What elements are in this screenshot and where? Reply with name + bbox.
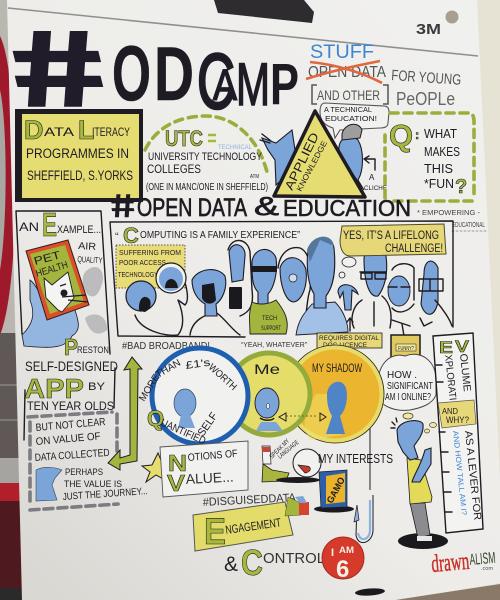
callout: a technical education [320, 103, 389, 138]
panel: what makes this fun: THIS [424, 162, 453, 176]
panel: data literacy programmes: ATA [44, 125, 74, 139]
subtitle: Stuff for young and other people: FOR YOUNG [391, 67, 462, 89]
panel: engagement: NGAGEMENT [224, 515, 282, 537]
callout: a technical education: A TECHNICAL [324, 105, 372, 114]
icon: fish hook [354, 428, 373, 543]
text: Preston: RESTON [77, 345, 109, 356]
title: #ODCamp [0, 9, 299, 128]
panel: university technology colleges: (ONE IN MANC/ONE IN SHEFFIELD) [146, 182, 268, 193]
quote heading: OMPUTING IS A FAMILY EXPERIENCE” [140, 229, 300, 241]
subtitle: Stuff for young and other people: AND OTHER [317, 87, 380, 103]
circle: quantified self: £1's [185, 357, 211, 372]
annotation: empowering educational: * EMPOWERING - [417, 208, 480, 217]
person: tall man in jacket [296, 237, 348, 335]
heading: #open data and education: # [107, 188, 139, 225]
panel: university technology colleges: UTC [165, 126, 203, 151]
text: disguised data: #DISGUISEDDATA [203, 492, 296, 509]
text: and control [224, 542, 325, 583]
panel: what makes this fun: : [415, 127, 419, 142]
badge: I am 6: 6 [336, 556, 349, 583]
callout: lifelong challenge: YES, IT'S A LIFELONG [343, 230, 439, 242]
person: screaming child [190, 270, 240, 335]
panel: volume exploration ruler: V [455, 337, 470, 356]
text: air quality: QUALITY [77, 254, 103, 265]
circle: me [228, 353, 326, 435]
panel: volume exploration ruler: XPLORATI [442, 354, 458, 401]
sign: funny? [391, 324, 420, 360]
icon: pet health tablet [26, 240, 89, 320]
text: perhaps the value is just the journey [62, 467, 148, 503]
panel: notions of value: ALUE... [185, 469, 234, 487]
text: perhaps the value is just the journey: JUST THE JOURNEY... [62, 486, 148, 503]
note: and why?: WHY? [446, 415, 469, 425]
panel: notions of value: OTIONS OF [187, 448, 238, 464]
panel: engagement [193, 502, 293, 552]
quote heading [115, 223, 300, 248]
note: and why?: AND [442, 406, 458, 416]
panel: university technology colleges: TECHNICAL [218, 144, 252, 151]
annotation: empowering educational: EDUCATIONAL [452, 222, 485, 229]
circle: quantified self: UANTIFIED [159, 417, 208, 447]
text: and control: & [224, 553, 238, 576]
panel: data literacy programmes: PROGRAMMES IN [26, 146, 129, 161]
heading: #open data and education: OPEN DATA [137, 194, 247, 222]
panel: an example, pet health app [16, 206, 110, 360]
flipchart clip [214, 0, 314, 23]
icon: speak my language ball: SPEAK MY [268, 437, 291, 460]
sign: funny?: FUNNY? [398, 346, 414, 352]
thought bubble: how significant am I online: SIGNIFICANT [387, 381, 433, 392]
panel: data literacy programmes: ITERACY [92, 125, 130, 139]
left column: self-designed app: TEN YEAR OLDS [27, 399, 114, 413]
callout: suffering from poor access technology: POOR ACCESS [119, 258, 166, 267]
person: tech support with sunglasses: TECH [262, 315, 277, 322]
panel: engagement: E [204, 511, 226, 552]
callout: a technical education: EDUCATION! [325, 114, 377, 123]
badge: I am 6 [322, 537, 364, 583]
panel: data literacy programmes: SHEFFIELD, S.YORKS [27, 167, 133, 183]
left column: self-designed app: BY [88, 381, 106, 393]
panel: volume exploration ruler: AS A LEVER FOR [462, 430, 483, 521]
icon: blue profile face [36, 467, 62, 501]
panel: computing is a family experience [110, 221, 453, 337]
callout: suffering from poor access technology: SUFFERING FROM [119, 248, 181, 257]
panel: volume exploration ruler: OLUME [457, 353, 473, 392]
panel: what makes this fun: Q [389, 118, 413, 153]
text: and control: ONTROL [263, 550, 325, 567]
circle: quantified self [137, 348, 248, 447]
annotation: a cliché [364, 156, 388, 192]
star [142, 453, 167, 482]
panel: what makes this fun: ? [455, 176, 467, 198]
person: man with square glasses [419, 261, 452, 326]
left column: self-designed app [24, 358, 148, 510]
quote heading: “ [115, 231, 119, 243]
arrow: double-headed me to shadow [279, 413, 326, 421]
icon: game book: GAMO [325, 476, 348, 505]
icon: speak my language ball [268, 437, 321, 477]
person: tech support with sunglasses [250, 249, 287, 334]
panel: what makes this fun [385, 113, 474, 201]
text: Preston: P [64, 334, 78, 360]
text: Preston [64, 334, 109, 360]
icon: blue fox [260, 130, 295, 185]
quote heading: C [123, 223, 139, 248]
callout: lifelong challenge [339, 224, 446, 278]
circle: quantified self: WORTH [206, 362, 239, 393]
panel: volume exploration ruler [433, 333, 483, 533]
panel: notions of value: V [167, 470, 186, 496]
circle: my shadow [286, 345, 384, 443]
circle: quantified self: SELF [196, 410, 221, 439]
panel: what makes this fun: *FUN [424, 177, 454, 191]
panel: data literacy programmes: L [78, 115, 94, 145]
title: #ODCamp: D [154, 32, 194, 117]
icon: game book [314, 470, 354, 512]
panel: notions of value: N [168, 450, 187, 476]
subtitle: Stuff for young and other people: PeOPLe [396, 89, 455, 109]
panel: an example, pet health app: E [42, 206, 57, 243]
badge: I am 6: AM [339, 545, 354, 555]
panel: notions of value [160, 441, 248, 497]
label: requires digital dog licence: DOG LICENCE [323, 343, 367, 349]
heading: #open data and education: EDUCATION [283, 195, 411, 221]
group: crying children [126, 263, 187, 335]
background: room left of the flipchart [0, 0, 30, 600]
panel: volume exploration ruler: AND HOW TALL AM I? [451, 430, 469, 516]
thought bubble: how significant am I online: AM I ONLINE? [385, 392, 431, 403]
heading: #open data and education: & [254, 191, 279, 221]
annotation: a cliché: CLICHÉ [364, 183, 388, 192]
circle: me: Me [254, 361, 280, 377]
title: #ODCamp: C [197, 37, 235, 125]
icon: dog with digital licence [338, 285, 358, 331]
triangle: applied knowledge [274, 111, 365, 197]
icon: blue hand [22, 280, 78, 347]
3M logo: 3M [416, 21, 441, 38]
circle: my shadow: MY SHADOW [312, 361, 362, 375]
callout: suffering from poor access technology: TECHNOLOGY [118, 272, 158, 279]
icon: speak my language ball: LANGUAGE [277, 439, 301, 461]
icon: person in flat cap [339, 124, 364, 190]
subtitle: Stuff for young and other people [306, 42, 462, 109]
punched hole [446, 10, 458, 24]
text: perhaps the value is just the journey: PERHAPS [65, 467, 103, 478]
panel: what makes this fun: WHAT [424, 127, 457, 141]
circle: quantified self: Q [147, 406, 164, 431]
text: air quality [77, 241, 104, 265]
subtitle: Stuff for young and other people: OPEN DATA [308, 64, 386, 81]
triangle: applied knowledge: APPLIED [282, 130, 322, 192]
background: floor strip at the bottom right [395, 584, 500, 600]
panel: data literacy programmes [15, 109, 143, 202]
decorative ink blot at bottom [355, 587, 385, 597]
label: requires digital dog licence [317, 333, 382, 349]
annotation: empowering educational [417, 208, 487, 231]
left column: self-designed app: ON VALUE OF [35, 430, 101, 448]
panel: data literacy programmes: D [24, 115, 44, 145]
note: and why? [438, 400, 476, 428]
panel: university technology colleges: ATM [250, 174, 259, 180]
person: man looking up [391, 418, 448, 549]
panel: university technology colleges: COLLEGES [147, 162, 201, 176]
callout: suffering from poor access technology [116, 245, 185, 288]
triangle: applied knowledge: KNOWLEDGE [295, 139, 329, 193]
icon: pet health tablet: PET [33, 249, 62, 268]
text: bad broadband: #BAD BROADBAND! [122, 340, 210, 352]
badge: I am 6: I [331, 547, 334, 559]
icon: air pollution cloud [83, 267, 107, 334]
arrow: green up and left arrow [108, 357, 142, 470]
text: and control: C [241, 542, 263, 583]
title: #ODCamp: A [213, 61, 238, 110]
panel: volume exploration ruler: E [439, 338, 453, 357]
thought bubble: how significant am I online: HOW . [387, 370, 417, 381]
text: yeah, whatever: “YEAH, WHATEVER” [241, 342, 308, 349]
text: air quality: AIR [78, 241, 96, 253]
person: teen with phone [228, 240, 252, 316]
left column: self-designed app: BUT NOT CLEAR [35, 416, 106, 434]
left column: self-designed app: SELF-DESIGNED [25, 358, 118, 374]
person: tech support with sunglasses: SUPPORT [261, 325, 281, 332]
person: woman with long hair [278, 248, 311, 330]
text: my interests: MY INTERESTS [318, 452, 393, 466]
label: requires digital dog licence: REQUIRES DIGITAL [319, 336, 380, 342]
panel: an example, pet health app: AN [19, 220, 39, 234]
circle: quantified self: MORE [137, 372, 163, 404]
title: #ODCamp: # [0, 9, 117, 128]
logo: drawnalism: .com [481, 566, 493, 572]
left column: self-designed app: DATA COLLECTED [34, 447, 110, 464]
callout: lifelong challenge: CHALLENGE! [385, 243, 443, 255]
subtitle: Stuff for young and other people: STUFF [310, 42, 374, 63]
icon: pet health tablet: HEALTH [35, 260, 69, 280]
icon: data cubes [285, 496, 309, 516]
person: older woman [388, 264, 414, 326]
panel: what makes this fun: MAKES [424, 145, 460, 159]
circle: quantified self: THAN [154, 358, 183, 381]
person: older man with glasses [352, 249, 391, 328]
panel: university technology colleges [145, 116, 268, 193]
text: perhaps the value is just the journey: THE VALUE IS [64, 479, 122, 490]
left column: self-designed app: APP [24, 373, 84, 404]
icon: football boot [262, 446, 320, 483]
heading: #open data and education [107, 188, 411, 225]
title: #ODCamp: M [236, 51, 270, 118]
title: #ODCamp: P [270, 52, 299, 117]
panel: university technology colleges: UNIVERSITY TECHNOLOGY [148, 151, 263, 163]
panel: an example, pet health app: XAMPLE... [57, 224, 101, 236]
logo: drawnalism: drawn [430, 548, 471, 578]
title: #ODCamp: O [112, 29, 151, 117]
thought bubble: how significant am I online [378, 354, 436, 433]
annotation: a cliché: A [369, 173, 375, 182]
